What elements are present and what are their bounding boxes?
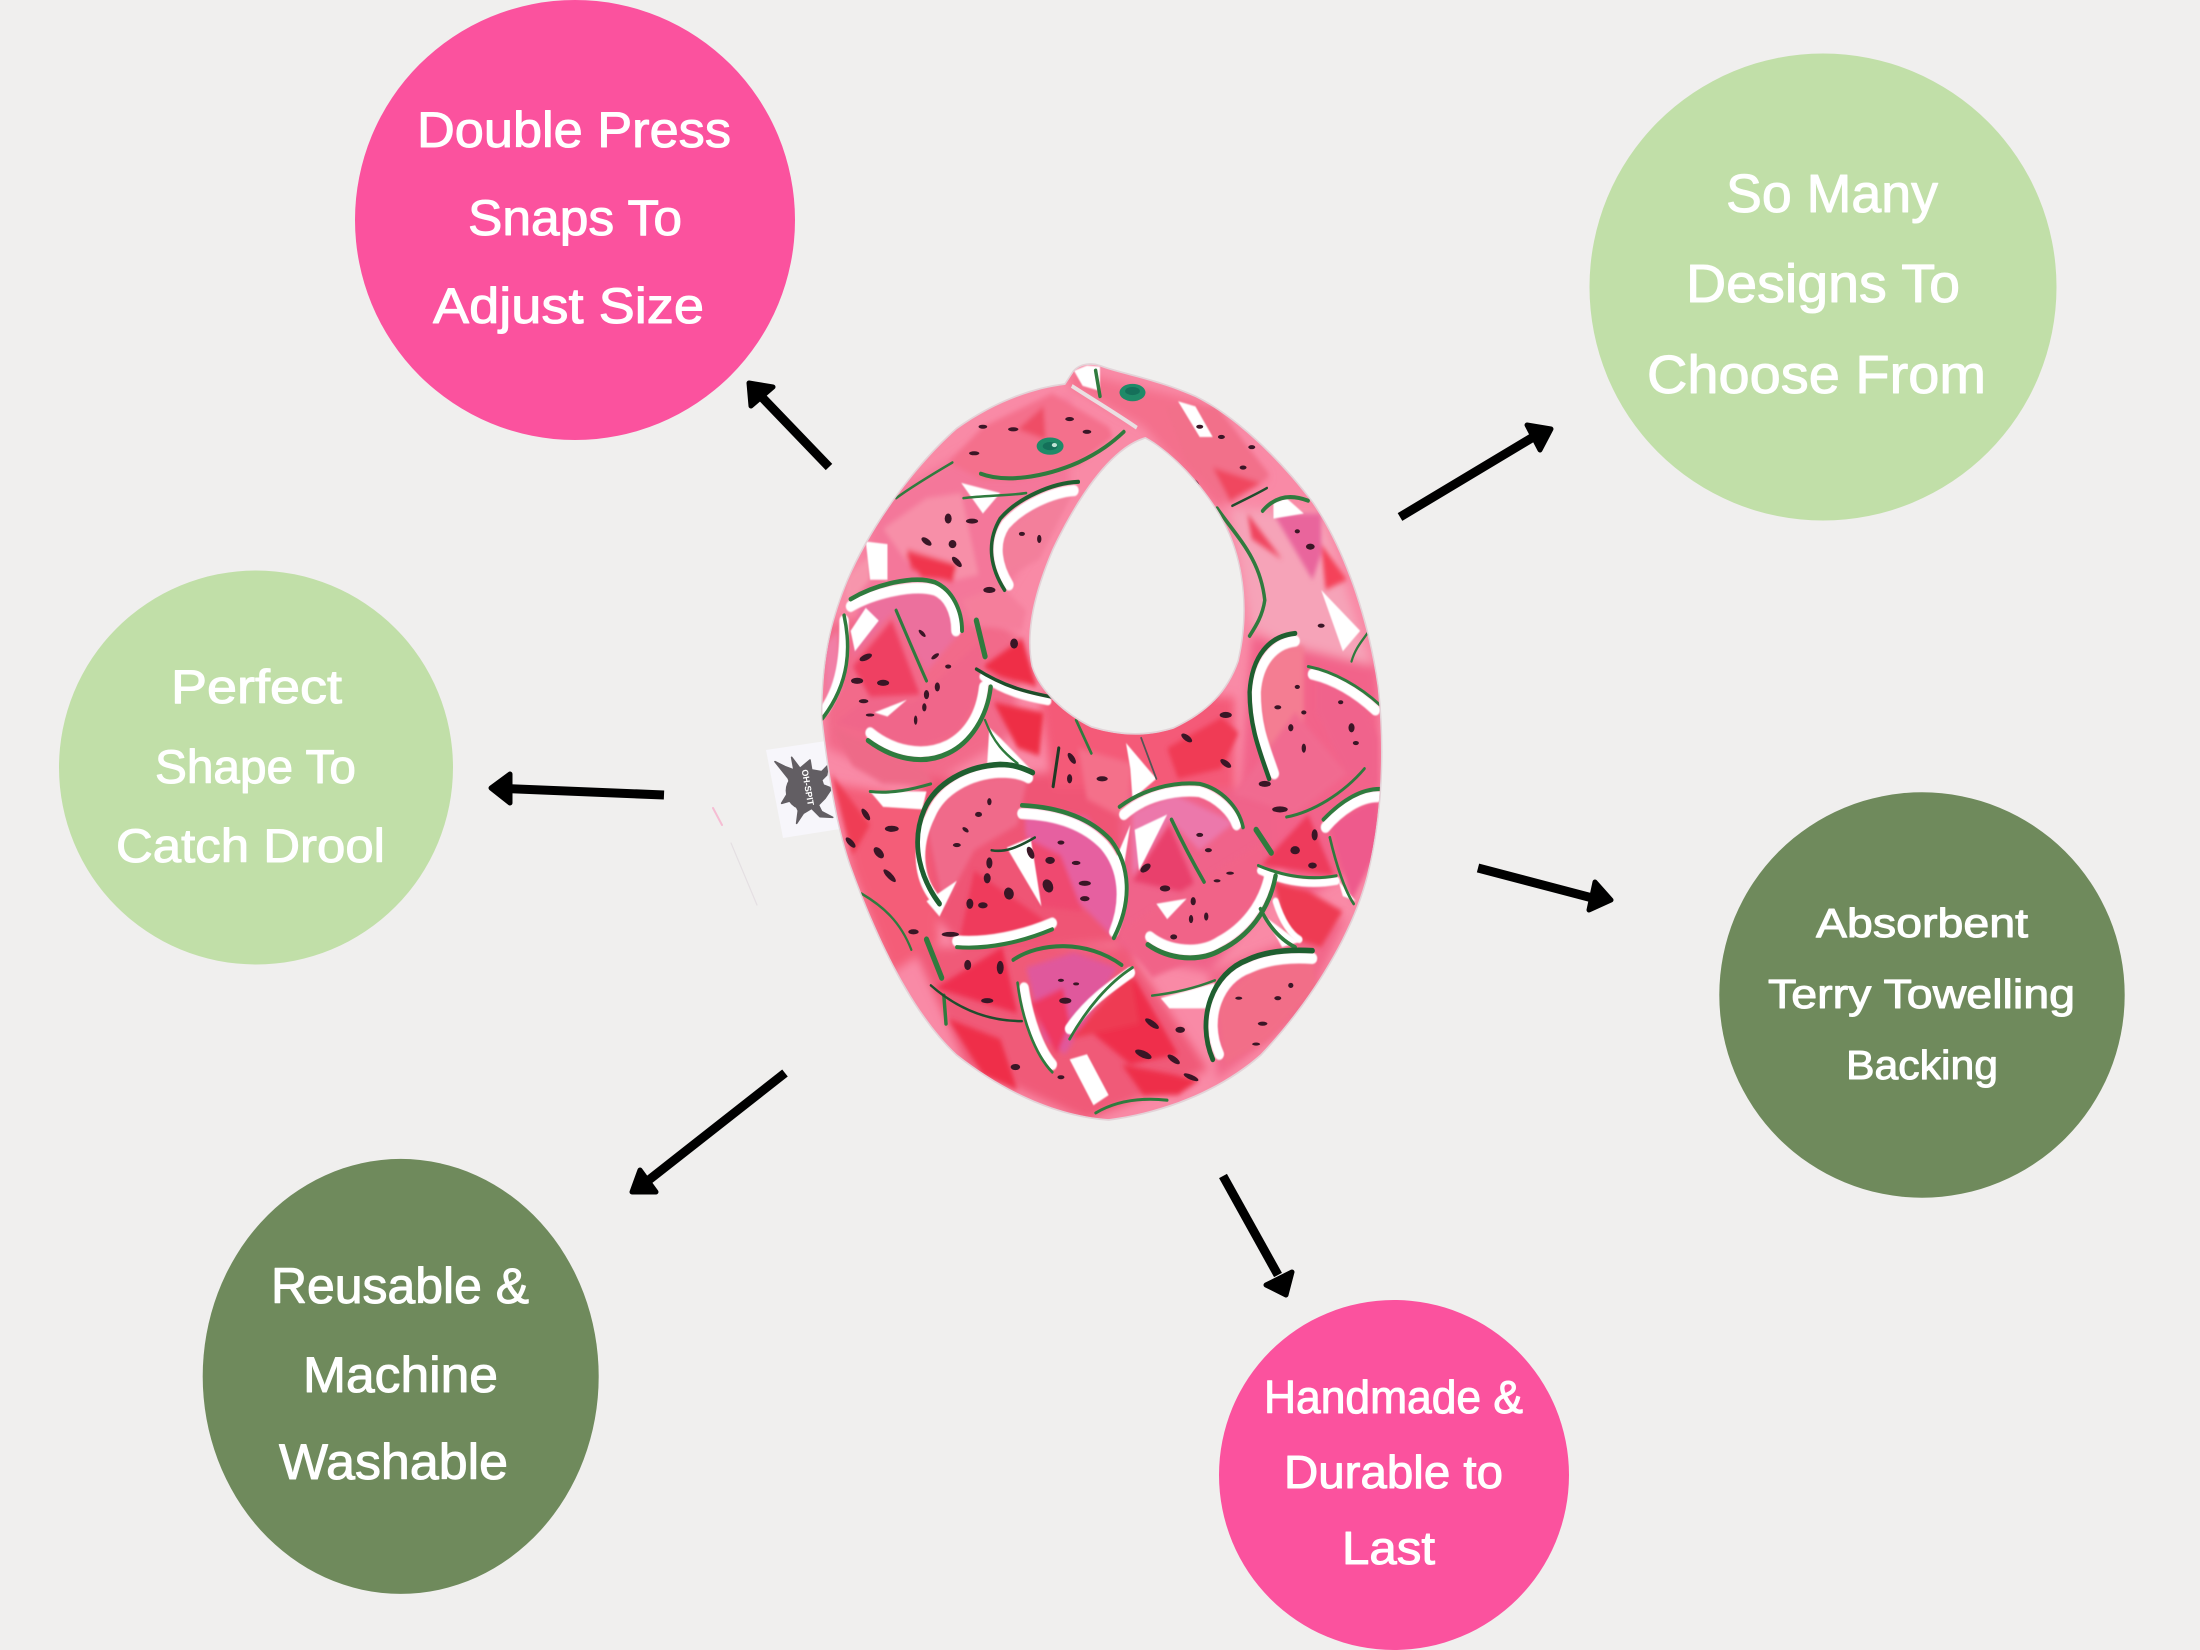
faint thread streak xyxy=(713,808,757,905)
label: so many designs to choose from: So Many xyxy=(1726,164,1938,224)
tag logo splat: OH-SPIT xyxy=(800,769,816,807)
panel: absorbent terry towelling xyxy=(1719,792,2125,1198)
label: reusable and machine washable: Machine xyxy=(303,1347,498,1403)
label: handmade and durable to last xyxy=(1264,1371,1523,1574)
label: absorbent terry towelling backing xyxy=(1768,900,2075,1088)
label: handmade and durable to last: Handmade & xyxy=(1264,1371,1523,1423)
panel: double press snaps xyxy=(355,0,795,440)
label: so many designs to choose from: Choose From xyxy=(1647,345,1986,405)
label: reusable and machine washable: Washable xyxy=(279,1434,508,1490)
green rinds xyxy=(822,371,1380,1113)
bib illustration xyxy=(805,355,1395,1131)
arrow: to so many designs xyxy=(1400,425,1551,517)
label: reusable and machine washable: Reusable & xyxy=(271,1258,529,1314)
white rinds and gaps xyxy=(825,491,1378,1064)
pink circle xyxy=(1219,1300,1569,1650)
label: perfect shape to catch drool xyxy=(116,660,385,872)
label: double press snaps to adjust size: Double Press xyxy=(417,102,731,158)
dark green circle xyxy=(1719,792,2125,1198)
label: perfect shape to catch drool: Shape To xyxy=(155,740,356,793)
watermelon seeds xyxy=(844,417,1359,1083)
terry towelling edge xyxy=(822,365,1381,1119)
arrow: to perfect shape xyxy=(491,774,664,803)
arrow: to reusable washable xyxy=(632,1073,785,1192)
arrow: to absorbent backing xyxy=(1478,868,1611,910)
label: double press snaps to adjust size: Snaps To xyxy=(468,190,682,246)
panel: handmade durable xyxy=(1219,1300,1569,1650)
dark green ellipse xyxy=(203,1159,599,1594)
snap: green press stud front xyxy=(1119,384,1146,401)
neck strap edge xyxy=(1072,386,1137,428)
label: handmade and durable to last: Last xyxy=(1342,1522,1435,1574)
broad pink underwash xyxy=(822,371,1382,1121)
light green circle xyxy=(59,570,453,964)
label: handmade and durable to last: Durable to xyxy=(1284,1446,1503,1498)
label: absorbent terry towelling backing: Backing xyxy=(1846,1042,1998,1088)
label: reusable and machine washable xyxy=(271,1258,529,1490)
pink circle xyxy=(355,0,795,440)
watermelon print fabric xyxy=(805,355,1395,1131)
panel: perfect shape xyxy=(59,570,453,964)
icon: brand tag xyxy=(766,741,840,838)
panel: so many designs xyxy=(1590,54,2056,520)
label: absorbent terry towelling backing: Terry Towelling xyxy=(1768,971,2075,1017)
light green circle xyxy=(1590,54,2056,520)
label: so many designs to choose from: Designs To xyxy=(1686,254,1960,314)
label: perfect shape to catch drool: Perfect xyxy=(171,660,342,713)
label: perfect shape to catch drool: Catch Drool xyxy=(116,819,385,872)
label: so many designs to choose from xyxy=(1647,164,1986,405)
soft watercolour flesh xyxy=(825,394,1378,1095)
label: double press snaps to adjust size: Adjust Size xyxy=(433,278,704,334)
label: double press snaps to adjust size xyxy=(417,102,731,334)
snap: green press stud rear xyxy=(1037,437,1064,455)
arrow: to handmade durable xyxy=(1223,1176,1292,1295)
arrow: to double press snaps xyxy=(749,383,829,467)
label: absorbent terry towelling backing: Absorbent xyxy=(1816,900,2029,946)
panel: reusable machine washable xyxy=(203,1159,599,1594)
